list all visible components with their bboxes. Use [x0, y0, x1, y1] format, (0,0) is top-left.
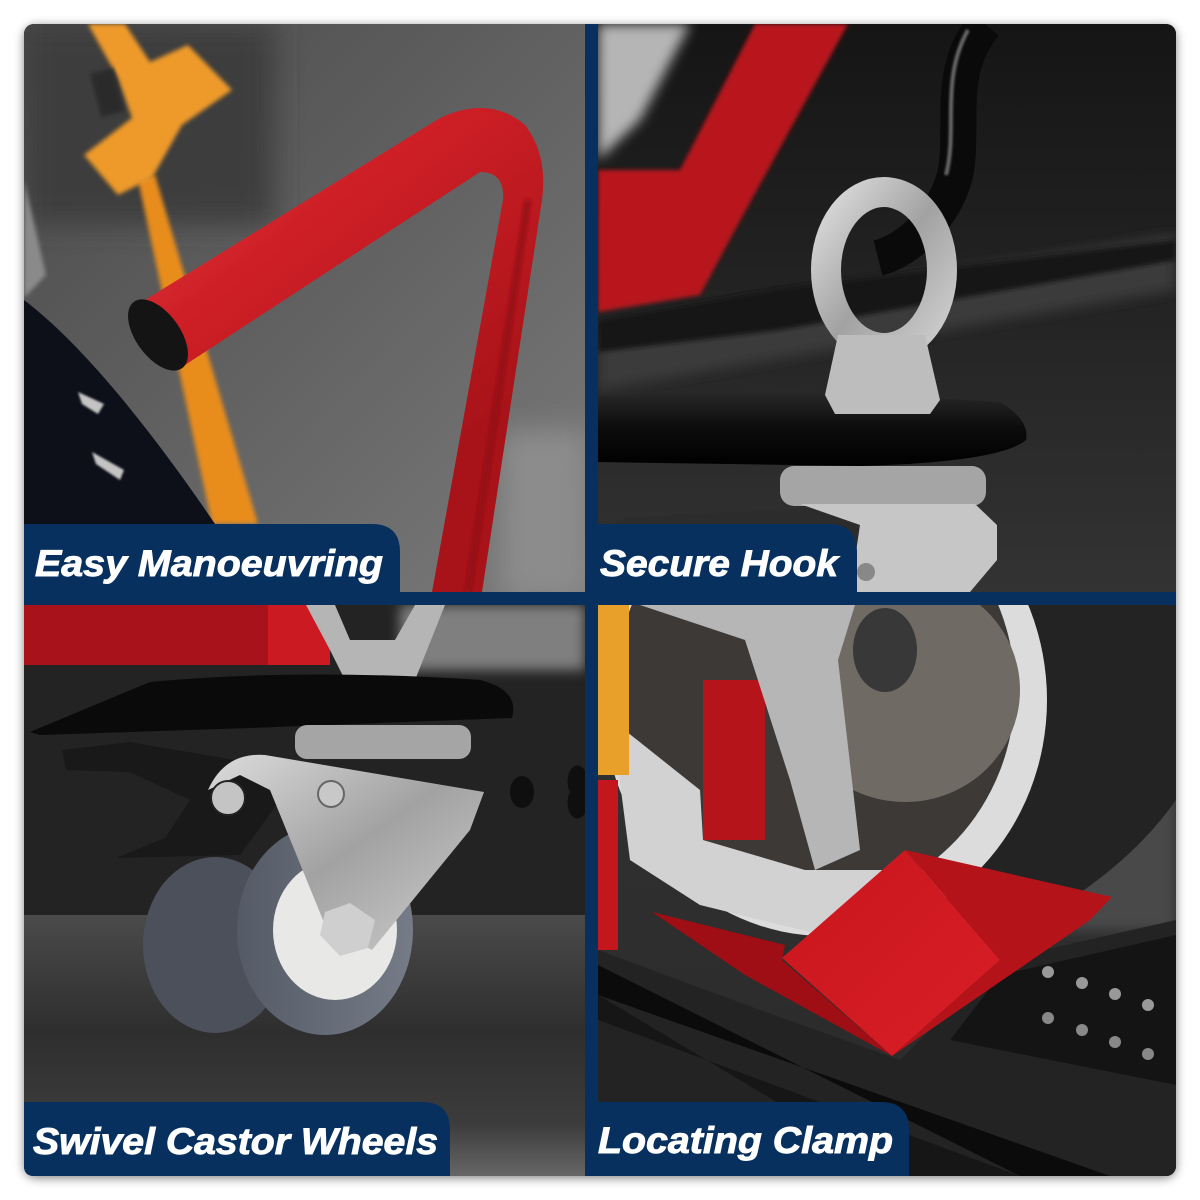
floor [598, 920, 1176, 1176]
eye bolt ring [825, 192, 942, 414]
label: Swivel Castor Wheels [24, 1102, 450, 1176]
red clamp [652, 850, 1112, 1056]
wheel spokes [640, 605, 860, 870]
motorcycle fairing [24, 300, 215, 524]
label: Secure Hook: Secure Hook [600, 543, 841, 584]
panel: easy manoeuvring photo [24, 24, 590, 600]
label: Locating Clamp [598, 1102, 909, 1176]
castor bracket [208, 755, 484, 950]
label: Secure Hook [598, 524, 1176, 605]
panel: swivel castor wheels photo [24, 605, 588, 1176]
red handle tube [116, 108, 543, 592]
label: Easy Manoeuvring: Easy Manoeuvring [35, 543, 383, 584]
castor: wheels [143, 825, 413, 1035]
tyre [982, 605, 1176, 890]
handle end cap [128, 299, 188, 371]
brake lever [62, 742, 280, 858]
brake disc [838, 605, 1020, 802]
front rail [598, 965, 1110, 1176]
label: Locating Clamp: Locating Clamp [598, 1120, 893, 1161]
hook chain [878, 24, 985, 258]
blurred red frame [598, 24, 848, 312]
perforated rail [950, 935, 1176, 1085]
label: Easy Manoeuvring [24, 524, 585, 605]
swivel race [295, 725, 471, 759]
label: Swivel Castor Wheels: Swivel Castor Wheels [33, 1121, 438, 1162]
orange strap [84, 24, 258, 524]
alloy rim [614, 605, 1047, 936]
black plate [598, 402, 1026, 466]
panel: secure hook photo [598, 24, 1176, 592]
black plate [30, 674, 513, 735]
panel: locating clamp photo [598, 605, 1176, 1176]
eye bolt [306, 605, 445, 680]
swivel [780, 466, 986, 506]
